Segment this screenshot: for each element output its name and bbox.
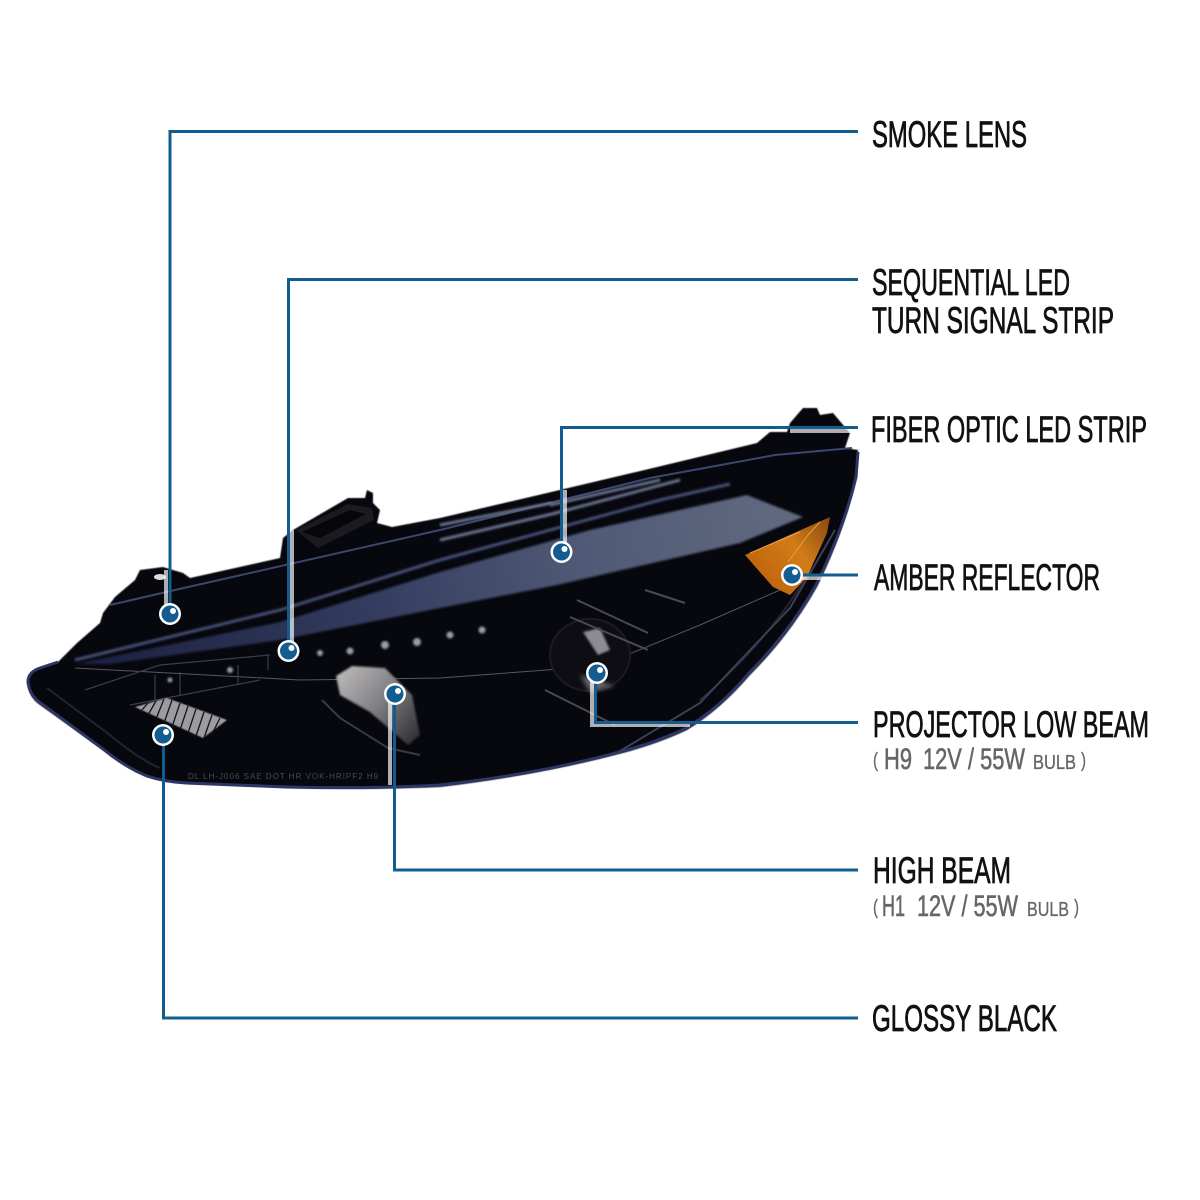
callout line: projector low beam xyxy=(592,673,858,725)
fiber optic light strip xyxy=(75,495,803,664)
lens rim xyxy=(28,452,858,788)
lens seam xyxy=(75,590,780,680)
callout line: sequential strip xyxy=(288,280,858,651)
callout dot: smoke lens xyxy=(159,603,181,625)
upper reflection xyxy=(75,484,730,660)
callout dot: high beam xyxy=(384,683,406,705)
lens markings: DL LH-J006 SAE DOT HR VOK-HRIPF2 H9 xyxy=(188,772,379,781)
label: sequential LED turn signal strip: SEQUENTIAL LED xyxy=(872,262,1070,303)
callout line: amber reflector xyxy=(792,575,858,578)
label: high beam: ) xyxy=(1074,897,1079,919)
high beam frame xyxy=(322,700,420,755)
inner rim xyxy=(47,570,810,768)
amber reflector ribs xyxy=(750,522,820,562)
callout line: fiber optic strip xyxy=(562,428,858,552)
turn signal cells xyxy=(85,655,270,705)
hatch lines xyxy=(142,699,220,738)
callout line: glossy black xyxy=(164,735,858,1018)
label: high beam xyxy=(873,850,1079,923)
label: sequential LED turn signal strip xyxy=(872,262,1114,341)
label: projector low beam xyxy=(873,704,1149,776)
label: high beam: BULB xyxy=(1027,899,1069,921)
label: smoke lens: SMOKE LENS xyxy=(872,114,1027,155)
headlight xyxy=(27,408,858,789)
label: high beam: H1 xyxy=(882,890,905,923)
callout dot: amber reflector xyxy=(781,564,803,586)
callout dot: glossy black xyxy=(152,724,174,746)
callout line: smoke lens xyxy=(166,132,858,614)
label: projector low beam: ( xyxy=(873,750,878,772)
high beam chrome bowl xyxy=(336,666,420,745)
callout dot: fiber optic strip xyxy=(550,541,572,563)
headlight housing xyxy=(27,408,858,789)
projector lens xyxy=(550,619,630,691)
upper lens edge xyxy=(110,448,852,605)
label: projector low beam: BULB xyxy=(1033,752,1076,774)
lower rim shine xyxy=(620,530,835,751)
low left reflector hatch xyxy=(135,698,227,738)
label: projector low beam: 12V / 55W xyxy=(923,743,1025,776)
label: high beam: 12V / 55W xyxy=(917,890,1018,923)
label: high beam: HIGH BEAM xyxy=(873,850,1011,891)
label: glossy black: GLOSSY BLACK xyxy=(872,998,1057,1039)
upper chrome strips xyxy=(440,480,680,540)
projector highlight xyxy=(583,628,610,655)
callout dot: projector low beam xyxy=(586,662,608,684)
amber reflector xyxy=(745,517,830,595)
projector shroud lines xyxy=(545,590,685,725)
callout dot: sequential strip xyxy=(278,640,300,662)
label: projector low beam: H9 xyxy=(884,743,912,776)
LED row xyxy=(168,626,486,682)
left mounting tab hole xyxy=(154,574,166,580)
label: projector low beam: ) xyxy=(1081,750,1086,772)
bracket inner xyxy=(302,510,366,538)
projector low glare xyxy=(580,675,615,692)
label: high beam: ( xyxy=(873,897,878,919)
callout line: high beam xyxy=(390,694,858,870)
top mounting bracket xyxy=(296,504,374,548)
